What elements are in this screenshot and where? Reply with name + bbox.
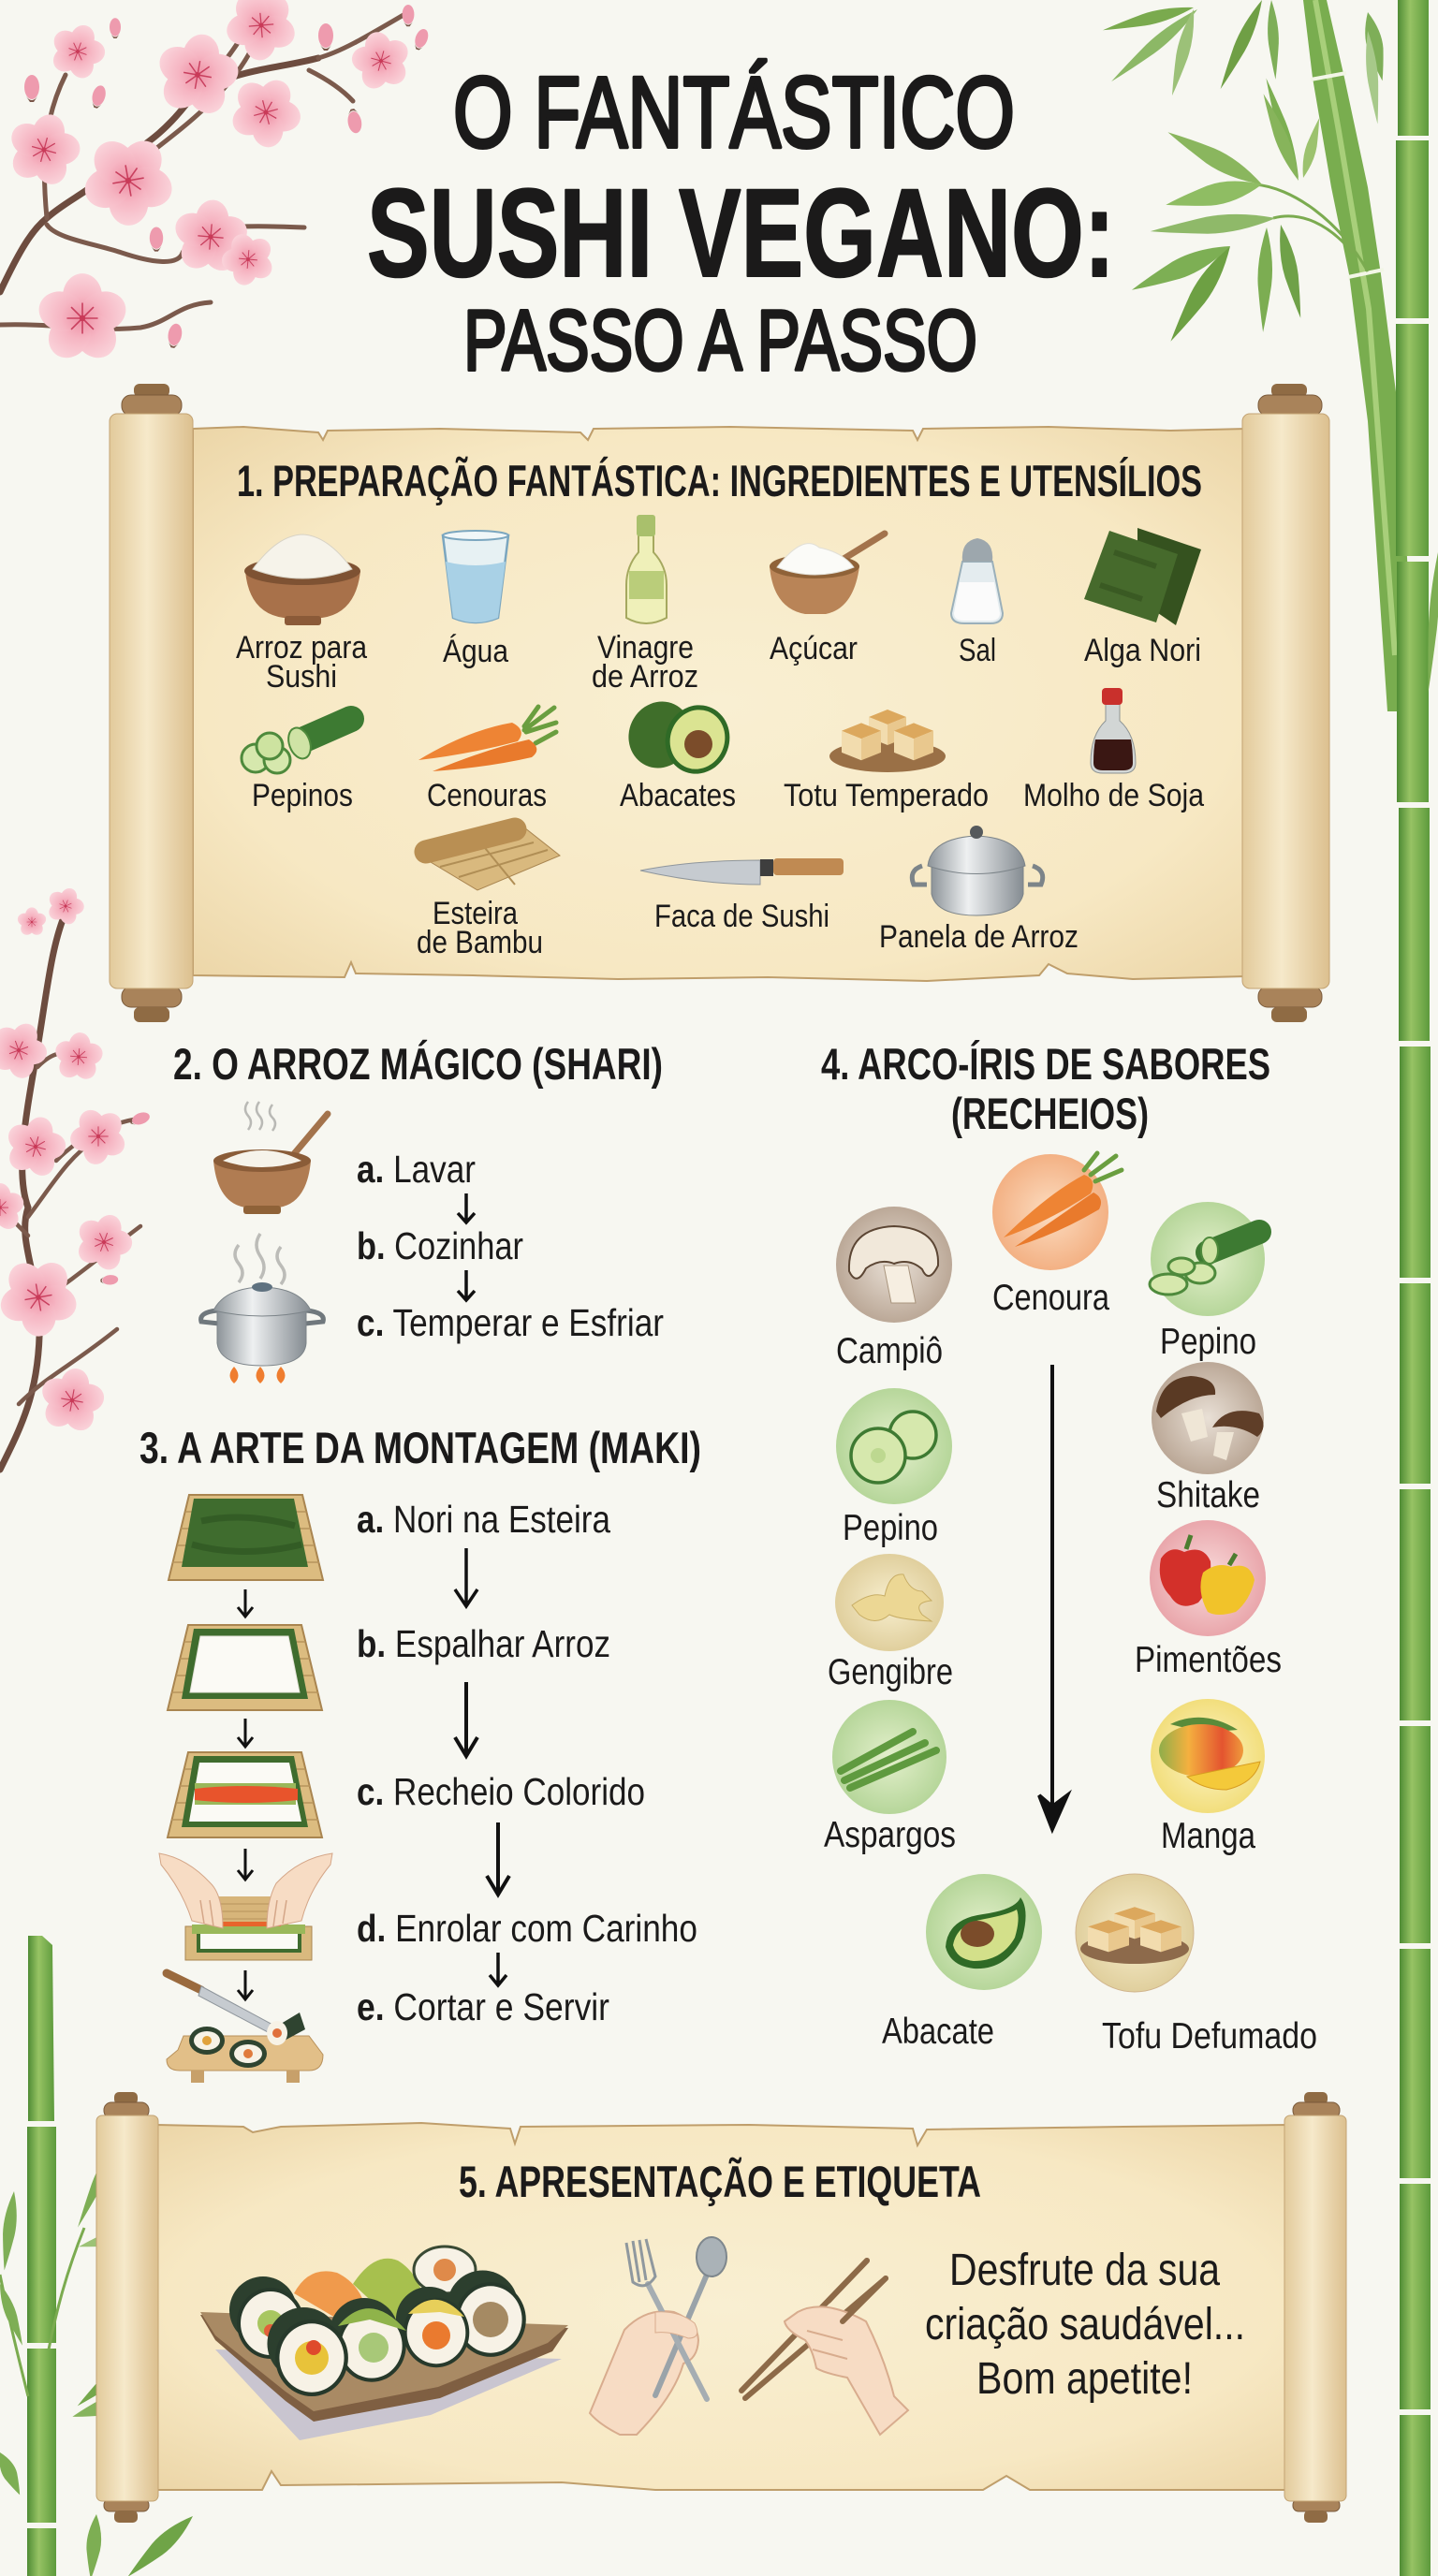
arrow <box>238 1970 253 1999</box>
closing message: criação saudável... <box>925 2300 1245 2349</box>
arrow <box>490 1953 506 1985</box>
utensil: esteira de bambu: de Bambu <box>417 925 543 960</box>
ingredient: abacates: Abacates <box>620 778 736 813</box>
ingredient: arroz para sushi <box>236 534 367 695</box>
step d enrolar: d. Enrolar com Carinho <box>357 1907 697 1950</box>
utensil: faca de sushi <box>640 858 844 934</box>
ingredient: tofu temperado <box>784 710 989 813</box>
ingredient: molho de soja: Molho de Soja <box>1023 778 1204 813</box>
ingredient: cenouras <box>418 707 556 813</box>
utensil: faca de sushi: Faca de Sushi <box>654 899 829 934</box>
filling: abacate: Abacate <box>882 2012 994 2052</box>
arrow <box>238 1849 253 1880</box>
filling: shitake: Shitake <box>1156 1475 1260 1515</box>
utensil: panela de arroz: Panela de Arroz <box>879 919 1078 955</box>
panel: section 4 rainbow of flavours <box>821 1039 1317 2056</box>
filling: cenoura: Cenoura <box>992 1278 1109 1318</box>
arrow <box>238 1719 253 1747</box>
ingredient: tofu temperado: Totu Temperado <box>784 778 989 813</box>
panel: section 1 preparation scroll <box>110 384 1329 1022</box>
utensil: esteira de bambu: Esteira <box>433 896 518 931</box>
filling: campiô: Campiô <box>836 1331 943 1371</box>
filling: pepino direita: Pepino <box>1160 1322 1256 1362</box>
title <box>367 55 1115 388</box>
step b cozinhar: b. Cozinhar <box>357 1224 523 1267</box>
filling: gengibre <box>828 1554 953 1692</box>
icon: hands rolling <box>159 1853 332 1960</box>
ingredient: sal: Sal <box>959 633 996 668</box>
ingredient: arroz para sushi: Arroz para <box>236 630 367 666</box>
filling: pimentões: Pimentões <box>1135 1640 1282 1680</box>
utensil: esteira de bambu <box>417 827 560 960</box>
closing message <box>925 2246 1245 2404</box>
step a nori: a. Nori na Esteira <box>357 1498 610 1541</box>
decoration: top-left cherry blossom branch <box>0 0 431 366</box>
closing message: Desfrute da sua <box>949 2246 1220 2295</box>
ingredient: cenouras: Cenouras <box>427 778 547 813</box>
filling: tofu defumado <box>1076 1874 1317 2056</box>
icon: colourful filling <box>168 1752 322 1837</box>
ingredient: vinagre de arroz: Vinagre <box>597 630 694 666</box>
ingredient: molho de soja <box>1023 688 1204 813</box>
utensil: panela de arroz <box>879 826 1078 955</box>
icon: rice spread on nori <box>168 1625 322 1710</box>
arrow <box>458 1193 475 1222</box>
scroll parchment <box>96 2092 1346 2523</box>
filling: manga <box>1151 1699 1265 1856</box>
ingredient: açúcar <box>770 534 885 666</box>
filling: aspargos: Aspargos <box>824 1815 956 1855</box>
ingredient: vinagre de arroz: de Arroz <box>592 659 698 695</box>
filling: campiô <box>836 1207 952 1371</box>
closing message: Bom apetite! <box>976 2354 1193 2404</box>
ingredient: açúcar: Açúcar <box>770 631 858 666</box>
filling: pimentões <box>1135 1520 1282 1680</box>
filling: manga: Manga <box>1161 1816 1255 1856</box>
ingredient: arroz para sushi: Sushi <box>266 659 337 695</box>
panel: section 3 maki assembly <box>139 1423 701 2083</box>
ingredient: vinagre de arroz <box>592 515 698 695</box>
scroll parchment <box>110 384 1329 1022</box>
icon: sushi platter <box>200 2247 568 2440</box>
step a lavar: a. Lavar <box>357 1148 476 1191</box>
icon: nori on mat <box>169 1495 323 1580</box>
heading 5: 5. APRESENTAÇÃO E ETIQUETA <box>459 2157 981 2206</box>
title: SUSHI VEGANO: <box>367 164 1115 303</box>
filling: shitake <box>1152 1362 1264 1515</box>
panel: section 2 magic rice <box>173 1039 664 1383</box>
arrow <box>458 1270 475 1300</box>
filling: tofu defumado: Tofu Defumado <box>1102 2016 1317 2056</box>
filling: pepino esquerda <box>836 1388 952 1548</box>
filling: pepino direita <box>1150 1202 1265 1362</box>
panel: section 5 presentation scroll <box>96 2092 1346 2523</box>
step c recheio: c. Recheio Colorido <box>357 1770 645 1813</box>
decoration: left cherry blossom branch <box>0 882 152 1470</box>
heading 4: 4. ARCO-ÍRIS DE SABORES <box>821 1039 1270 1089</box>
icon: hand with fork and spoon <box>590 2237 726 2435</box>
arrow <box>455 1682 477 1756</box>
step c temperar: c. Temperar e Esfriar <box>357 1301 664 1344</box>
ingredient: água: Água <box>443 634 508 669</box>
ingredient: alga nori <box>1084 528 1201 668</box>
arrow <box>455 1548 477 1606</box>
arrow <box>487 1822 509 1895</box>
ingredient: pepinos <box>242 719 353 813</box>
long arrow <box>1039 1365 1067 1829</box>
decoration: right bamboo with leaves <box>1101 0 1438 2576</box>
ingredient: alga nori: Alga Nori <box>1084 633 1201 668</box>
heading 4 <box>821 1039 1270 1138</box>
arrow <box>238 1589 253 1617</box>
filling: gengibre: Gengibre <box>828 1652 953 1692</box>
filling: cenoura <box>992 1153 1122 1318</box>
icon: rice bowl with steam <box>213 1102 328 1214</box>
filling: pepino esquerda: Pepino <box>843 1508 938 1548</box>
ingredient: água <box>443 531 508 669</box>
heading 2: 2. O ARROZ MÁGICO (SHARI) <box>173 1039 663 1089</box>
heading 4: (RECHEIOS) <box>951 1089 1149 1138</box>
title: PASSO A PASSO <box>463 293 977 388</box>
icon: cutting board <box>167 1973 323 2083</box>
step e cortar: e. Cortar e Servir <box>357 1985 609 2028</box>
ingredient: abacates <box>618 691 740 813</box>
filling: abacate <box>882 1874 1042 2052</box>
step b espalhar: b. Espalhar Arroz <box>357 1622 610 1665</box>
heading 3: 3. A ARTE DA MONTAGEM (MAKI) <box>139 1423 701 1472</box>
icon: hand with chopsticks <box>741 2261 908 2435</box>
icon: pot on flames <box>201 1234 323 1383</box>
ingredient: pepinos: Pepinos <box>252 778 353 813</box>
decoration: bottom-left bamboo with leaves <box>0 1936 198 2576</box>
ingredient: sal <box>951 538 1003 668</box>
filling: aspargos <box>824 1700 956 1855</box>
title: O FANTÁSTICO <box>453 55 1015 168</box>
